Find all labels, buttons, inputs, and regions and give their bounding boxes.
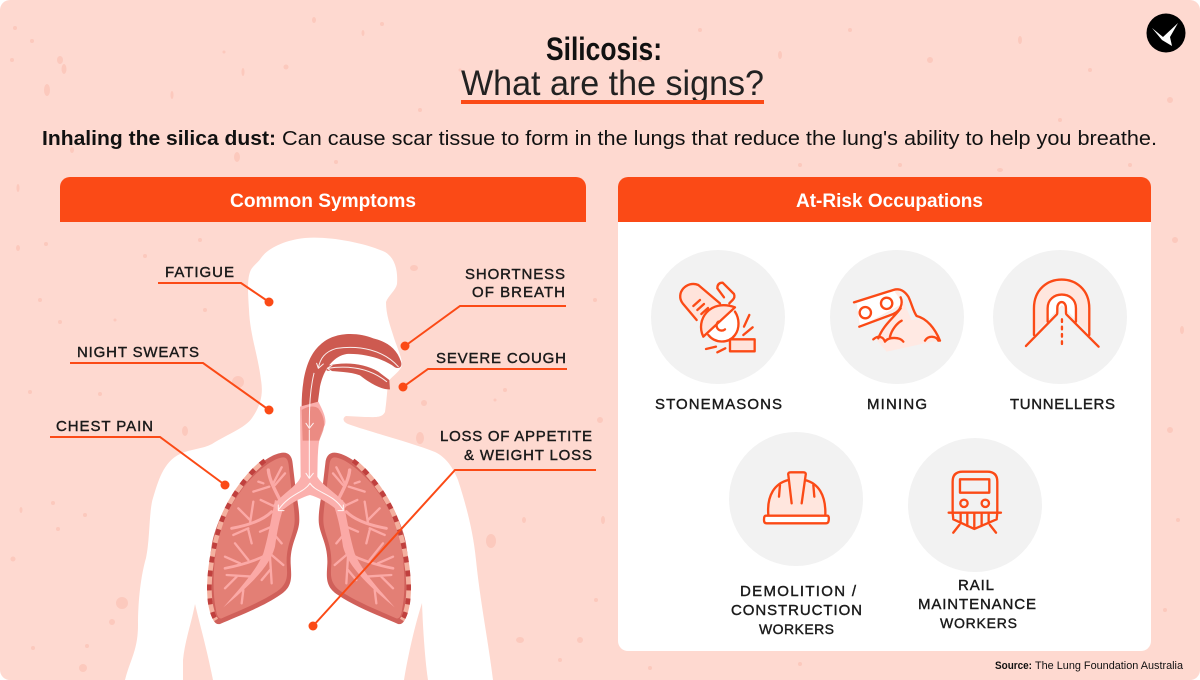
source: The Lung Foundation Australia	[1035, 660, 1184, 672]
label: night sweats	[70, 344, 274, 414]
silhouette	[125, 238, 493, 680]
label: severe cough	[398, 350, 567, 392]
intro text: Can cause scar tissue to form in the lungs that reduce the lung's ability to help you breathe.	[282, 128, 1157, 150]
label: severe cough: SEVERE COUGH	[436, 350, 566, 367]
label: rail maintenance workers	[918, 577, 1036, 631]
body diagram	[125, 238, 493, 680]
label: loss of appetite and weight loss: LOSS OF APPETITE	[440, 428, 592, 445]
label: loss of appetite and weight loss	[308, 428, 596, 630]
occupation: rail maintenance workers	[908, 438, 1042, 572]
occupation: stonemasons	[651, 250, 785, 384]
label: rail maintenance workers: WORKERS	[940, 615, 1017, 631]
intro text: Inhaling the silica dust:	[42, 128, 276, 150]
label: mining: MINING	[867, 396, 927, 413]
panel header: common symptoms: Common Symptoms	[230, 191, 416, 212]
label: demolition / construction workers	[731, 583, 862, 637]
panel header: common symptoms	[60, 177, 586, 222]
label: shortness of breath: SHORTNESS	[465, 266, 565, 283]
occupation: mining	[830, 250, 964, 384]
occupation: tunnellers	[993, 250, 1127, 384]
airway and trachea	[273, 334, 401, 511]
right lung	[319, 453, 409, 624]
occupation: demolition / construction workers	[729, 432, 863, 566]
label: chest pain	[50, 418, 230, 490]
label: chest pain: CHEST PAIN	[56, 418, 153, 435]
label: rail maintenance workers: RAIL	[958, 577, 994, 594]
logo	[1146, 14, 1186, 52]
label: tunnellers: TUNNELLERS	[1010, 396, 1115, 413]
label: shortness of breath	[400, 266, 566, 350]
label: rail maintenance workers: MAINTENANCE	[918, 596, 1036, 613]
label: fatigue	[158, 264, 274, 306]
label: shortness of breath: OF BREATH	[472, 284, 565, 301]
label: stonemasons: STONEMASONS	[655, 396, 782, 413]
label: demolition / construction workers: DEMOLITION /	[740, 583, 857, 600]
left lung	[209, 453, 299, 624]
label: demolition / construction workers: CONSTRUCTION	[731, 602, 862, 619]
label: fatigue: FATIGUE	[165, 264, 234, 281]
label: demolition / construction workers: WORKERS	[759, 621, 834, 637]
label: night sweats: NIGHT SWEATS	[77, 344, 199, 361]
label: loss of appetite and weight loss: & WEIGHT LOSS	[464, 447, 592, 464]
title	[461, 31, 764, 104]
airflow arrows	[278, 347, 398, 511]
title: Silicosis:	[546, 31, 662, 67]
title: What are the signs?	[461, 64, 764, 103]
panel: at-risk occupations	[618, 177, 1151, 651]
panel: at-risk occupations: At-Risk Occupations	[796, 191, 983, 212]
source: Source:	[995, 660, 1032, 672]
